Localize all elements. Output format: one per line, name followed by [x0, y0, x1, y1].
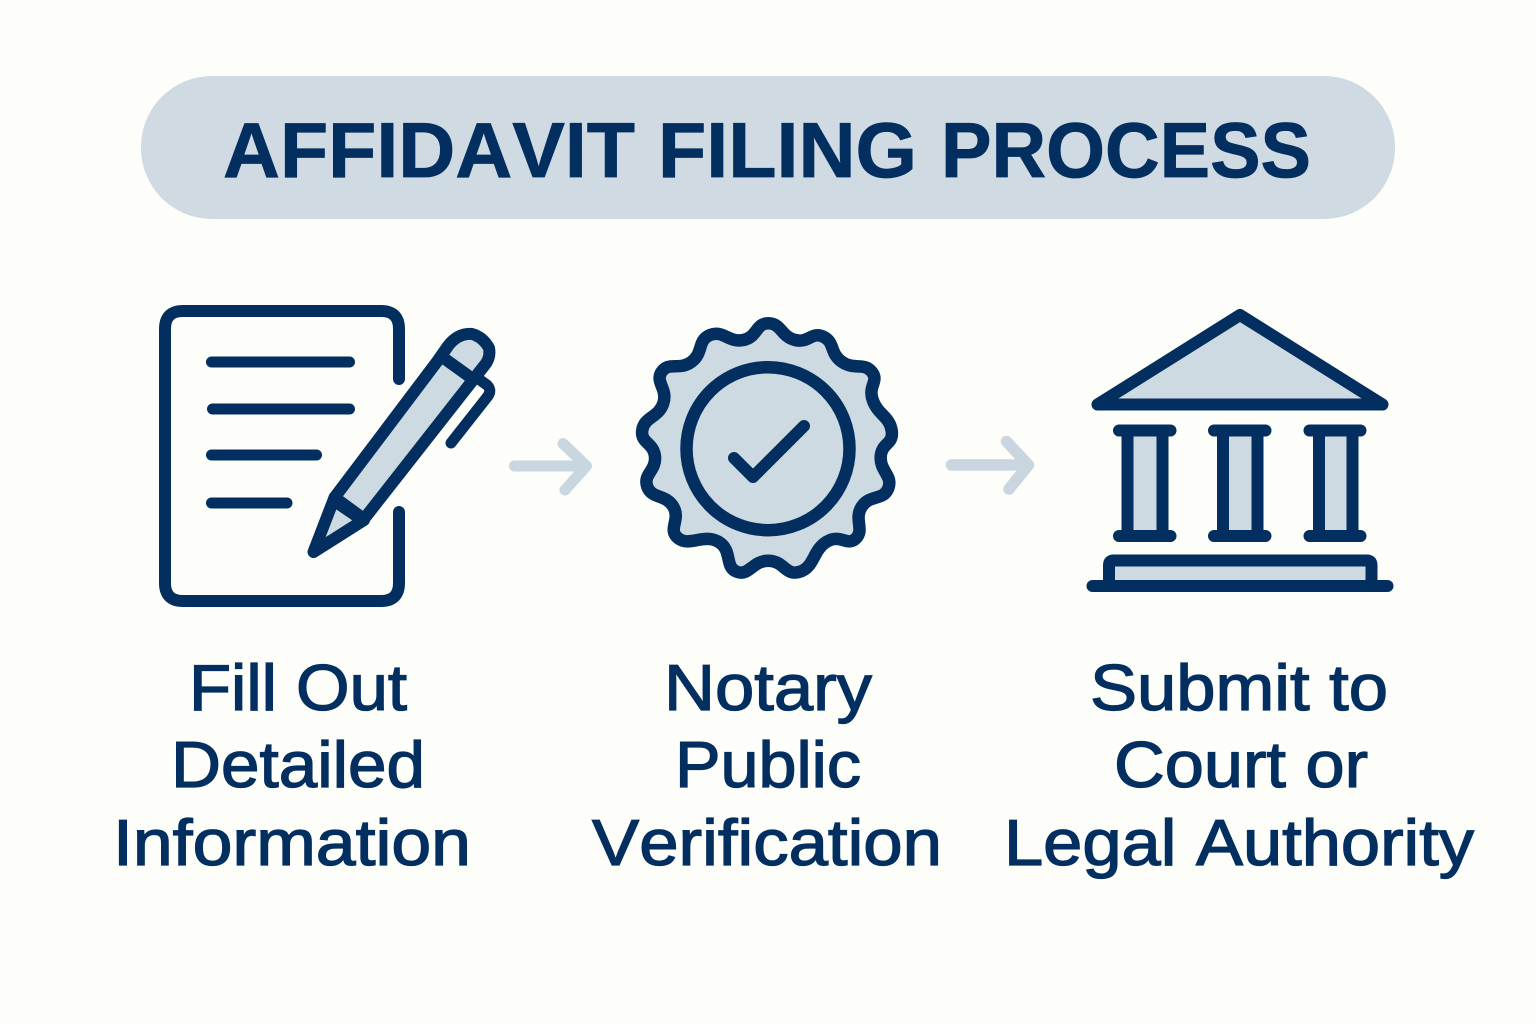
step 2 label: Notary: [664, 651, 873, 724]
step 1 label: Information: [113, 806, 471, 879]
step 3 label: Court or: [1114, 728, 1368, 801]
arrow: step 2 to 3: [952, 442, 1028, 489]
step 1 label: Fill Out: [189, 651, 407, 724]
title: FILING: [658, 106, 917, 194]
icon: document with pen: [165, 311, 490, 601]
step 2 label: Public: [675, 728, 861, 801]
step 1 label: [113, 651, 471, 879]
icon: courthouse: [1092, 315, 1388, 586]
step 2 label: Verification: [592, 806, 942, 879]
title: AFFIDAVIT: [223, 106, 635, 194]
title: PROCESS: [941, 106, 1311, 194]
title banner: [141, 76, 1395, 219]
step 3 label: [1004, 651, 1475, 879]
arrow: step 1 to 2: [514, 444, 586, 490]
title: [223, 106, 1311, 194]
step 1 label: Detailed: [171, 728, 425, 801]
step 3 label: Legal Authority: [1004, 806, 1475, 879]
step 3 label: Submit to: [1090, 651, 1388, 724]
step 2 label: [592, 651, 942, 879]
icon: notary seal: [642, 323, 892, 573]
